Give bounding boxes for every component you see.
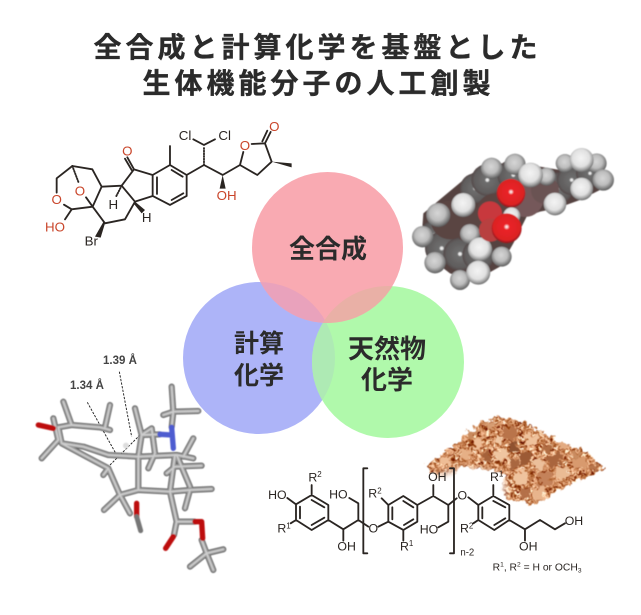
circle: 計算化学 [183,282,335,434]
structural formula: lignin: OH [337,540,356,554]
distance labels: 1.39 Å [103,354,137,367]
structural formula: lignin: OH [565,514,583,528]
structural formula: lignin: OH [519,540,538,554]
structural formula: natural product: O [51,192,62,207]
label: 天然物化学: 化学 [361,365,413,395]
structural formula: lignin: R [400,539,409,553]
title: 全合成と計算化学を基盤とした [93,32,542,63]
title: 生体機能分子の人工創製 [142,68,495,99]
brackets [363,468,454,553]
circle: 天然物化学 [312,286,464,438]
structural formula: natural product: H [109,197,118,212]
structural formula: lignin: n-2 [460,548,474,559]
structural formula: lignin: HO [329,487,348,501]
label: 全合成: 全合成 [289,234,367,264]
structural formula: natural product: O [269,119,279,134]
distance labels [70,354,137,392]
label: 天然物化学 [348,334,426,395]
structural formula: lignin: 1 [499,470,504,479]
structural formula: natural product: OH [217,188,237,203]
sticks [38,387,223,570]
circle: 全合成 [252,172,403,323]
substituent note: 3 [578,568,582,575]
structural formula: natural product: Cl [218,128,231,143]
substituent note: 2 [517,562,521,569]
structural formula: natural product: Br [85,233,99,248]
structural formula: lignin: 1 [409,539,414,548]
structural formula: natural product: H [142,210,151,225]
structural formula: lignin: R [308,470,317,484]
structural formula: lignin: O [458,488,467,502]
wood chips photo [427,415,603,505]
structural formula: lignin: HO [268,488,287,502]
structural formula: lignin: R [277,522,286,536]
space-filling molecular model [412,148,614,290]
label: 計算化学 [234,330,284,390]
stick molecular model [38,372,223,570]
structural formula: lignin [268,468,583,575]
structural formula: lignin: 2 [317,470,322,479]
label: 計算化学: 計算 [234,330,284,358]
label: 計算化学: 化学 [234,362,284,390]
wood flakes [437,420,598,502]
structural formula: natural product: O [75,183,85,198]
structural formula: lignin: R [460,522,469,536]
structural formula: lignin: R [368,487,377,501]
structural formula: natural product [45,119,292,248]
substituent note: , R [504,562,517,573]
dashed distance lines [87,372,140,465]
label: 天然物化学: 天然物 [348,334,426,364]
substituent note: 1 [500,562,504,569]
structural formula: natural product: O [122,143,133,158]
title [93,32,542,99]
substituent note: = H or OCH [521,562,578,573]
structural formula: lignin: O [369,521,378,535]
structural formula: lignin: 2 [469,521,474,530]
distance labels: 1.34 Å [70,379,104,392]
structural formula: natural product: Cl [179,128,191,143]
structural formula: lignin: 1 [286,521,291,530]
structural formula: natural product: HO [45,219,65,234]
structural formula: lignin: OH [428,470,447,484]
structural formula: lignin: R [490,470,499,484]
venn diagram [183,172,464,438]
structural formula: lignin: HO [420,523,438,537]
structural formula: natural product: O [240,138,250,153]
substituent note: R [493,562,500,573]
structural formula: lignin: 2 [377,486,382,495]
